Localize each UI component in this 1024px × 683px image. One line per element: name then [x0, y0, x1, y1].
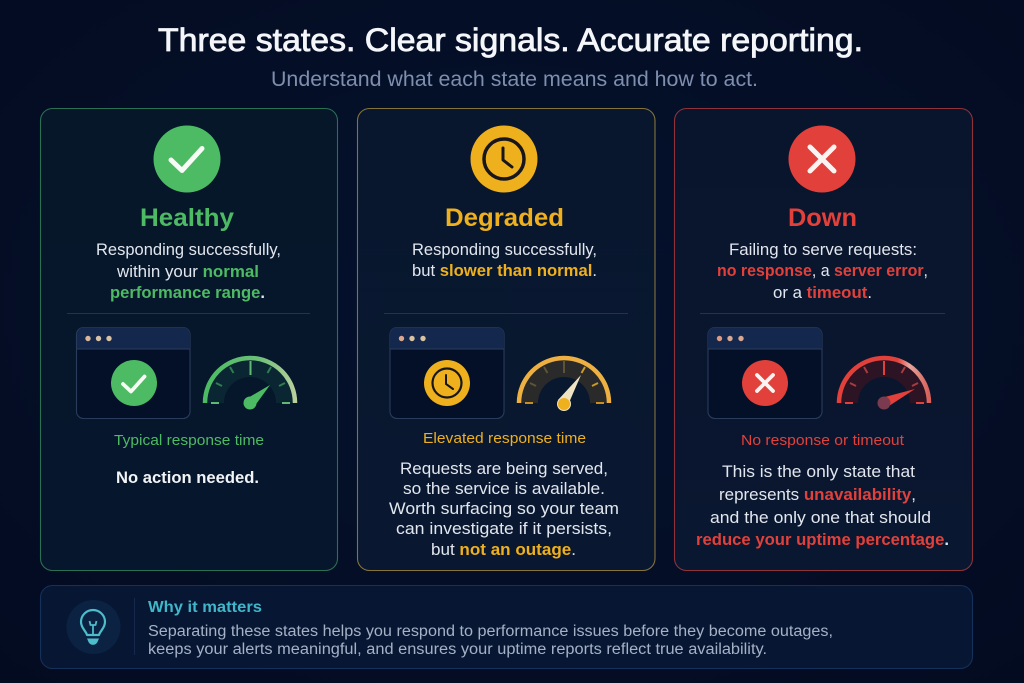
caption: elevated response time: Elevated response time	[423, 431, 586, 447]
why it matters body: Separating these states helps you respond to performance issues before they become outages,	[148, 623, 833, 640]
icon: healthy check	[154, 126, 220, 192]
icon: light bulb	[66, 600, 120, 654]
degraded explanation: so the service is available.	[403, 479, 605, 498]
chart: down gauge	[839, 358, 929, 410]
degraded explanation: can investigate if it persists,	[396, 519, 612, 538]
down description: or a timeout.	[773, 283, 872, 302]
why it matters body: keeps your alerts meaningful, and ensures your uptime reports reflect true availability.	[148, 641, 767, 658]
down explanation: reduce your uptime percentage.	[696, 530, 949, 549]
icon: down cross	[788, 126, 856, 192]
down explanation: This is the only state that	[722, 462, 915, 481]
heading: healthy: Healthy	[140, 204, 234, 232]
down description	[717, 240, 928, 302]
healthy description: within your normal	[116, 262, 259, 281]
title: Three states. Clear signals. Accurate reporting.	[158, 22, 863, 58]
chart: degraded gauge	[519, 358, 609, 410]
degraded description: Responding successfully,	[412, 240, 597, 259]
subtitle: Understand what each state means and how to act.	[271, 68, 758, 91]
heading: degraded: Degraded	[445, 204, 564, 232]
degraded description: but slower than normal.	[412, 261, 597, 280]
down description: Failing to serve requests:	[729, 240, 917, 259]
icon: healthy browser window	[76, 328, 190, 418]
action: no action needed: No action needed.	[116, 469, 259, 487]
why it matters body	[148, 623, 833, 658]
down explanation	[696, 462, 949, 549]
panel: degraded	[358, 108, 655, 570]
panel: healthy	[40, 108, 338, 570]
caption: typical response time: Typical response time	[114, 433, 264, 449]
down description: no response, a server error,	[717, 261, 928, 280]
degraded explanation	[389, 459, 619, 559]
heading: why it matters: Why it matters	[148, 599, 262, 616]
down explanation: represents unavailability,	[719, 485, 916, 504]
icon: degraded clock	[470, 126, 538, 192]
healthy description: Responding successfully,	[96, 240, 281, 259]
degraded explanation: Worth surfacing so your team	[389, 499, 619, 518]
healthy description: performance range.	[110, 283, 265, 302]
degraded description	[412, 240, 597, 280]
heading: down: Down	[788, 204, 857, 232]
icon: degraded browser window	[390, 328, 504, 418]
degraded explanation: Requests are being served,	[400, 459, 608, 478]
chart: healthy gauge	[205, 358, 295, 410]
down explanation: and the only one that should	[710, 508, 931, 527]
healthy description	[96, 240, 281, 302]
panel: why it matters	[40, 586, 972, 668]
panel: down	[674, 108, 972, 570]
caption: no response or timeout: No response or timeout	[741, 433, 904, 449]
degraded explanation: but not an outage.	[431, 540, 576, 559]
icon: down browser window	[708, 328, 822, 418]
